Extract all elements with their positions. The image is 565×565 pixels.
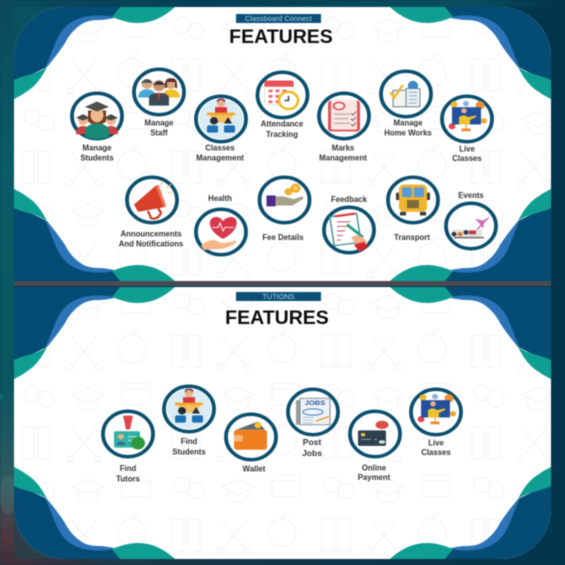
label: Manage bbox=[393, 118, 423, 128]
label: Manage bbox=[82, 144, 112, 152]
feature: Find Tutors bbox=[103, 411, 153, 484]
icon: staff bbox=[134, 69, 184, 115]
feature: Fee Details bbox=[260, 177, 310, 242]
panel: Classboard Connect features bbox=[14, 7, 551, 281]
feature: Manage Staff bbox=[134, 69, 184, 138]
feature: Find Students bbox=[164, 386, 214, 456]
feature: Online Payment bbox=[350, 411, 400, 482]
label: Find bbox=[120, 464, 136, 473]
feature: Transport bbox=[388, 177, 438, 242]
label: Classes bbox=[421, 448, 451, 457]
label: Live bbox=[428, 438, 444, 448]
icon: clipboard and pen bbox=[324, 207, 374, 253]
icon: graduates bbox=[72, 93, 122, 139]
icon: job newspaper: JOBS bbox=[305, 399, 325, 407]
label: Tracking bbox=[266, 130, 298, 139]
feature: Health bbox=[196, 194, 246, 255]
heading badge bbox=[236, 292, 321, 301]
icon: online teacher bbox=[442, 96, 492, 142]
feature: Marks Management bbox=[319, 93, 369, 162]
feature: Classes Management bbox=[196, 96, 246, 162]
icon: tutor id card bbox=[103, 411, 153, 457]
icon: event stage bbox=[446, 203, 496, 249]
label: Management bbox=[319, 154, 367, 162]
feature: Attendance Tracking bbox=[258, 72, 308, 139]
icon: calendar and clock bbox=[258, 72, 308, 118]
label: Transport bbox=[394, 233, 430, 242]
label: Students bbox=[80, 154, 114, 162]
icon: open book bbox=[381, 71, 431, 117]
label: Wallet bbox=[243, 464, 266, 474]
label: Find bbox=[181, 437, 197, 446]
label: Live bbox=[459, 144, 475, 154]
label: Health bbox=[208, 194, 232, 203]
icon: wallet bbox=[226, 414, 276, 460]
label: Tutors bbox=[116, 474, 140, 484]
icon: classroom bbox=[164, 386, 214, 432]
heading badge: TUTIONS bbox=[262, 292, 295, 301]
panel background bbox=[14, 287, 551, 559]
icon: megaphone bbox=[127, 177, 177, 223]
feature: Wallet bbox=[226, 414, 276, 474]
label: Attendance bbox=[261, 120, 303, 128]
divider bbox=[14, 281, 551, 286]
feature: Events bbox=[446, 191, 496, 249]
heading: FEATURES bbox=[225, 307, 329, 329]
icon: heart in hand bbox=[196, 209, 246, 255]
heading badge: Classboard Connect bbox=[245, 14, 312, 23]
label: Home Works bbox=[384, 128, 432, 138]
icon: school bus bbox=[388, 177, 438, 223]
panel: Tutions features bbox=[14, 287, 551, 559]
label: And Notifications bbox=[119, 240, 184, 248]
label: Fee Details bbox=[262, 233, 304, 242]
feature: Manage Home Works bbox=[381, 71, 432, 138]
label: Feedback bbox=[331, 195, 368, 204]
label: Management bbox=[196, 154, 244, 162]
label: Jobs bbox=[302, 448, 322, 458]
label: Manage bbox=[144, 118, 174, 128]
feature: Feedback bbox=[324, 195, 374, 253]
feature: Live Classes bbox=[442, 96, 492, 163]
feature: Manage Students bbox=[72, 93, 122, 162]
icon: fee payment bbox=[260, 177, 310, 223]
label: Classes bbox=[205, 144, 235, 152]
label: Classes bbox=[452, 154, 482, 163]
feature: Post Jobs bbox=[288, 389, 338, 458]
heading: FEATURES bbox=[229, 26, 333, 48]
panel background bbox=[14, 7, 551, 281]
label: Online bbox=[362, 464, 386, 472]
label: Events bbox=[458, 191, 484, 200]
icon: mark sheet bbox=[319, 93, 369, 139]
feature: Announcements and Notifications bbox=[119, 177, 184, 248]
label: Staff bbox=[150, 128, 168, 138]
label: Announcements bbox=[120, 230, 182, 238]
label: Students bbox=[172, 448, 206, 456]
label: Marks bbox=[332, 144, 354, 152]
icon: payment card bbox=[350, 411, 400, 457]
icon: online teacher bbox=[411, 389, 461, 435]
label: Payment bbox=[358, 473, 391, 482]
feature: Live Classes bbox=[411, 389, 461, 457]
label: Post bbox=[303, 437, 321, 447]
icon: classroom bbox=[196, 96, 246, 142]
